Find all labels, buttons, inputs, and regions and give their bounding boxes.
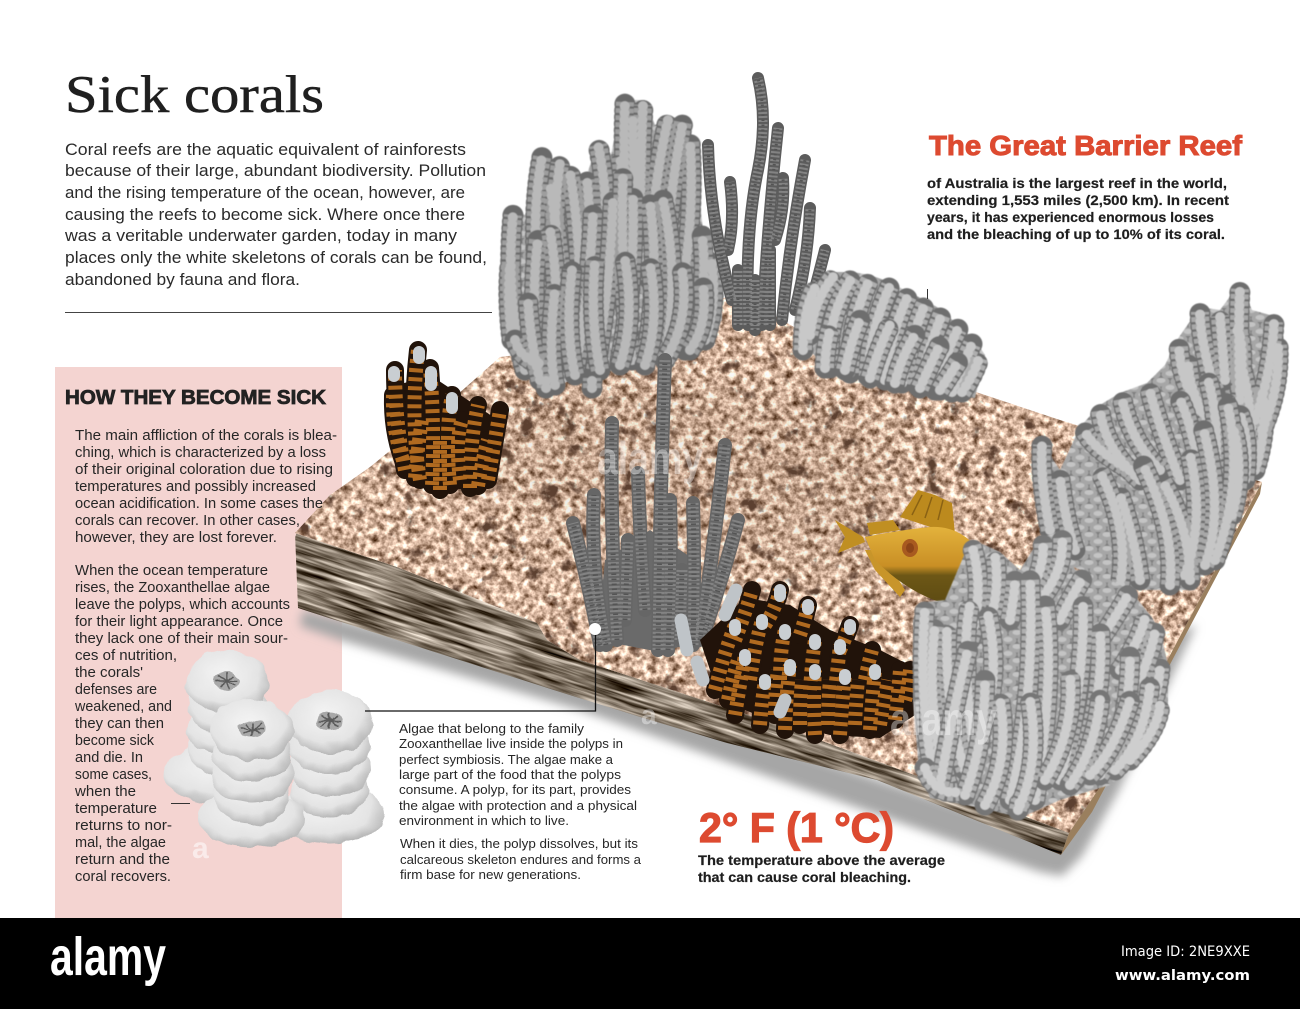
panel body text: when the [74, 784, 136, 800]
panel body text: some cases, [75, 767, 152, 783]
intro paragraph: Coral reefs are the aquatic equivalent of rainforests [65, 140, 466, 159]
algae caption: perfect symbiosis. The algae make a [399, 752, 614, 767]
footer url: www.alamy.com [1115, 968, 1250, 984]
intro paragraph: and the rising temperature of the ocean, however, are [65, 183, 465, 202]
Great Barrier Reef description: of Australia is the largest reef in the world, [927, 176, 1227, 191]
panel body text: become sick [75, 733, 155, 749]
intro paragraph [64, 140, 487, 289]
algae caption [399, 721, 642, 882]
temperature stat: 2° F (1 °C) [699, 804, 894, 851]
polyp: back [163, 650, 279, 804]
watermarks on reef: alamy [890, 693, 997, 745]
panel body text: ocean acidification. In some cases the [75, 496, 323, 512]
panel watermark: a [192, 832, 209, 865]
Great Barrier Reef description [927, 176, 1230, 242]
reef drop shadow [300, 610, 1196, 876]
panel body text: for their light appearance. Once [75, 614, 283, 630]
temperature description: The temperature above the average [698, 853, 946, 868]
illustration: three coral polyps [163, 650, 384, 848]
algae caption: firm base for new generations. [400, 867, 581, 882]
panel body text: temperatures and possibly increased [75, 479, 316, 495]
image id: Image ID: 2NE9XXE [1121, 944, 1250, 960]
panel body text: The main affliction of the corals is blea- [75, 428, 337, 444]
panel body text: return and the [75, 852, 170, 868]
footer logo: alamy [50, 927, 166, 987]
polyp leader tick [171, 803, 190, 804]
coral: large back-left colony [505, 100, 722, 388]
panel body text: and die. In [75, 750, 143, 766]
algae caption: consume. A polyp, for its part, provides [399, 782, 632, 797]
panel body text: however, they are lost forever. [75, 530, 277, 546]
Great Barrier Reef description: extending 1,553 miles (2,500 km). In recent [927, 193, 1230, 208]
panel body text: leave the polyps, which accounts [75, 597, 290, 613]
panel body text: mal, the algae [75, 835, 166, 851]
panel body text: rises, the Zooxanthellae algae [75, 580, 270, 596]
panel: how they become sick [55, 367, 342, 918]
title: Sick corals [65, 66, 324, 124]
algae caption: environment in which to live. [399, 813, 569, 828]
panel body text: temperature [75, 801, 157, 817]
footer bar [0, 918, 1300, 1009]
polyp: front [198, 699, 306, 848]
panel body text: corals can recover. In other cases, [75, 513, 300, 529]
algae caption: calcareous skeleton endures and forms a [400, 852, 642, 867]
coral: thin dark branching colony [708, 78, 825, 330]
intro paragraph: was a veritable underwater garden, today in many [64, 226, 458, 245]
Great Barrier Reef description: years, it has experienced enormous losses [927, 210, 1214, 225]
panel body text: When the ocean temperature [75, 563, 268, 579]
coral: tiger-striped colony, front [681, 590, 915, 738]
intro paragraph: places only the white skeletons of corals can be found, [65, 248, 487, 267]
intro paragraph: causing the reefs to become sick. Where once there [65, 205, 465, 224]
coral: low white colony [800, 272, 985, 398]
coral: large front-right colony [913, 530, 1168, 818]
panel body text [74, 428, 337, 885]
panel body text: ching, which is characterized by a loss [75, 445, 326, 461]
watermarks on reef: a [641, 699, 657, 730]
algae caption: Algae that belong to the family [399, 721, 585, 736]
Great Barrier Reef description: and the bleaching of up to 10% of its coral. [927, 227, 1225, 242]
panel body text: they lack one of their main sour- [75, 631, 288, 647]
temperature description [698, 853, 946, 885]
reef surface [295, 297, 1262, 833]
panel body text: of their original coloration due to rising [75, 462, 333, 478]
watermarks on reef [597, 432, 997, 745]
coral: thin grey front colony [573, 360, 738, 652]
coral: tiger-striped colony, left [393, 350, 500, 490]
panel body text: coral recovers. [75, 869, 171, 885]
watermarks on reef: alamy [597, 432, 703, 484]
intro paragraph: abandoned by fauna and flora. [65, 270, 300, 289]
tick mark [927, 289, 928, 299]
panel body text: they can then [75, 716, 164, 732]
panel body text: weakened, and [74, 699, 172, 715]
polyp: right [276, 690, 384, 844]
heading: The Great Barrier Reef: The Great Barrier Reef [929, 130, 1243, 161]
panel heading: HOW THEY BECOME SICK [65, 387, 327, 409]
callout leader line with marker [365, 623, 601, 711]
panel body text: returns to nor- [75, 818, 172, 834]
algae caption: When it dies, the polyp dissolves, but its [400, 836, 639, 851]
intro paragraph: because of their large, abundant biodiversity. Pollution [65, 161, 486, 180]
panel body text: ces of nutrition, [75, 648, 177, 664]
coral: right back colony [1040, 283, 1284, 590]
fish [835, 490, 985, 605]
illustration: reef block with corals and fish [270, 78, 1284, 877]
reef side faces [270, 482, 1262, 877]
panel body text: the corals' [75, 665, 143, 681]
algae caption: Zooxanthellae live inside the polyps in [399, 736, 623, 751]
algae caption: the algae with protection and a physical [399, 798, 637, 813]
panel body text: defenses are [75, 682, 157, 698]
temperature description: that can cause coral bleaching. [698, 870, 911, 885]
algae caption: large part of the food that the polyps [399, 767, 622, 782]
